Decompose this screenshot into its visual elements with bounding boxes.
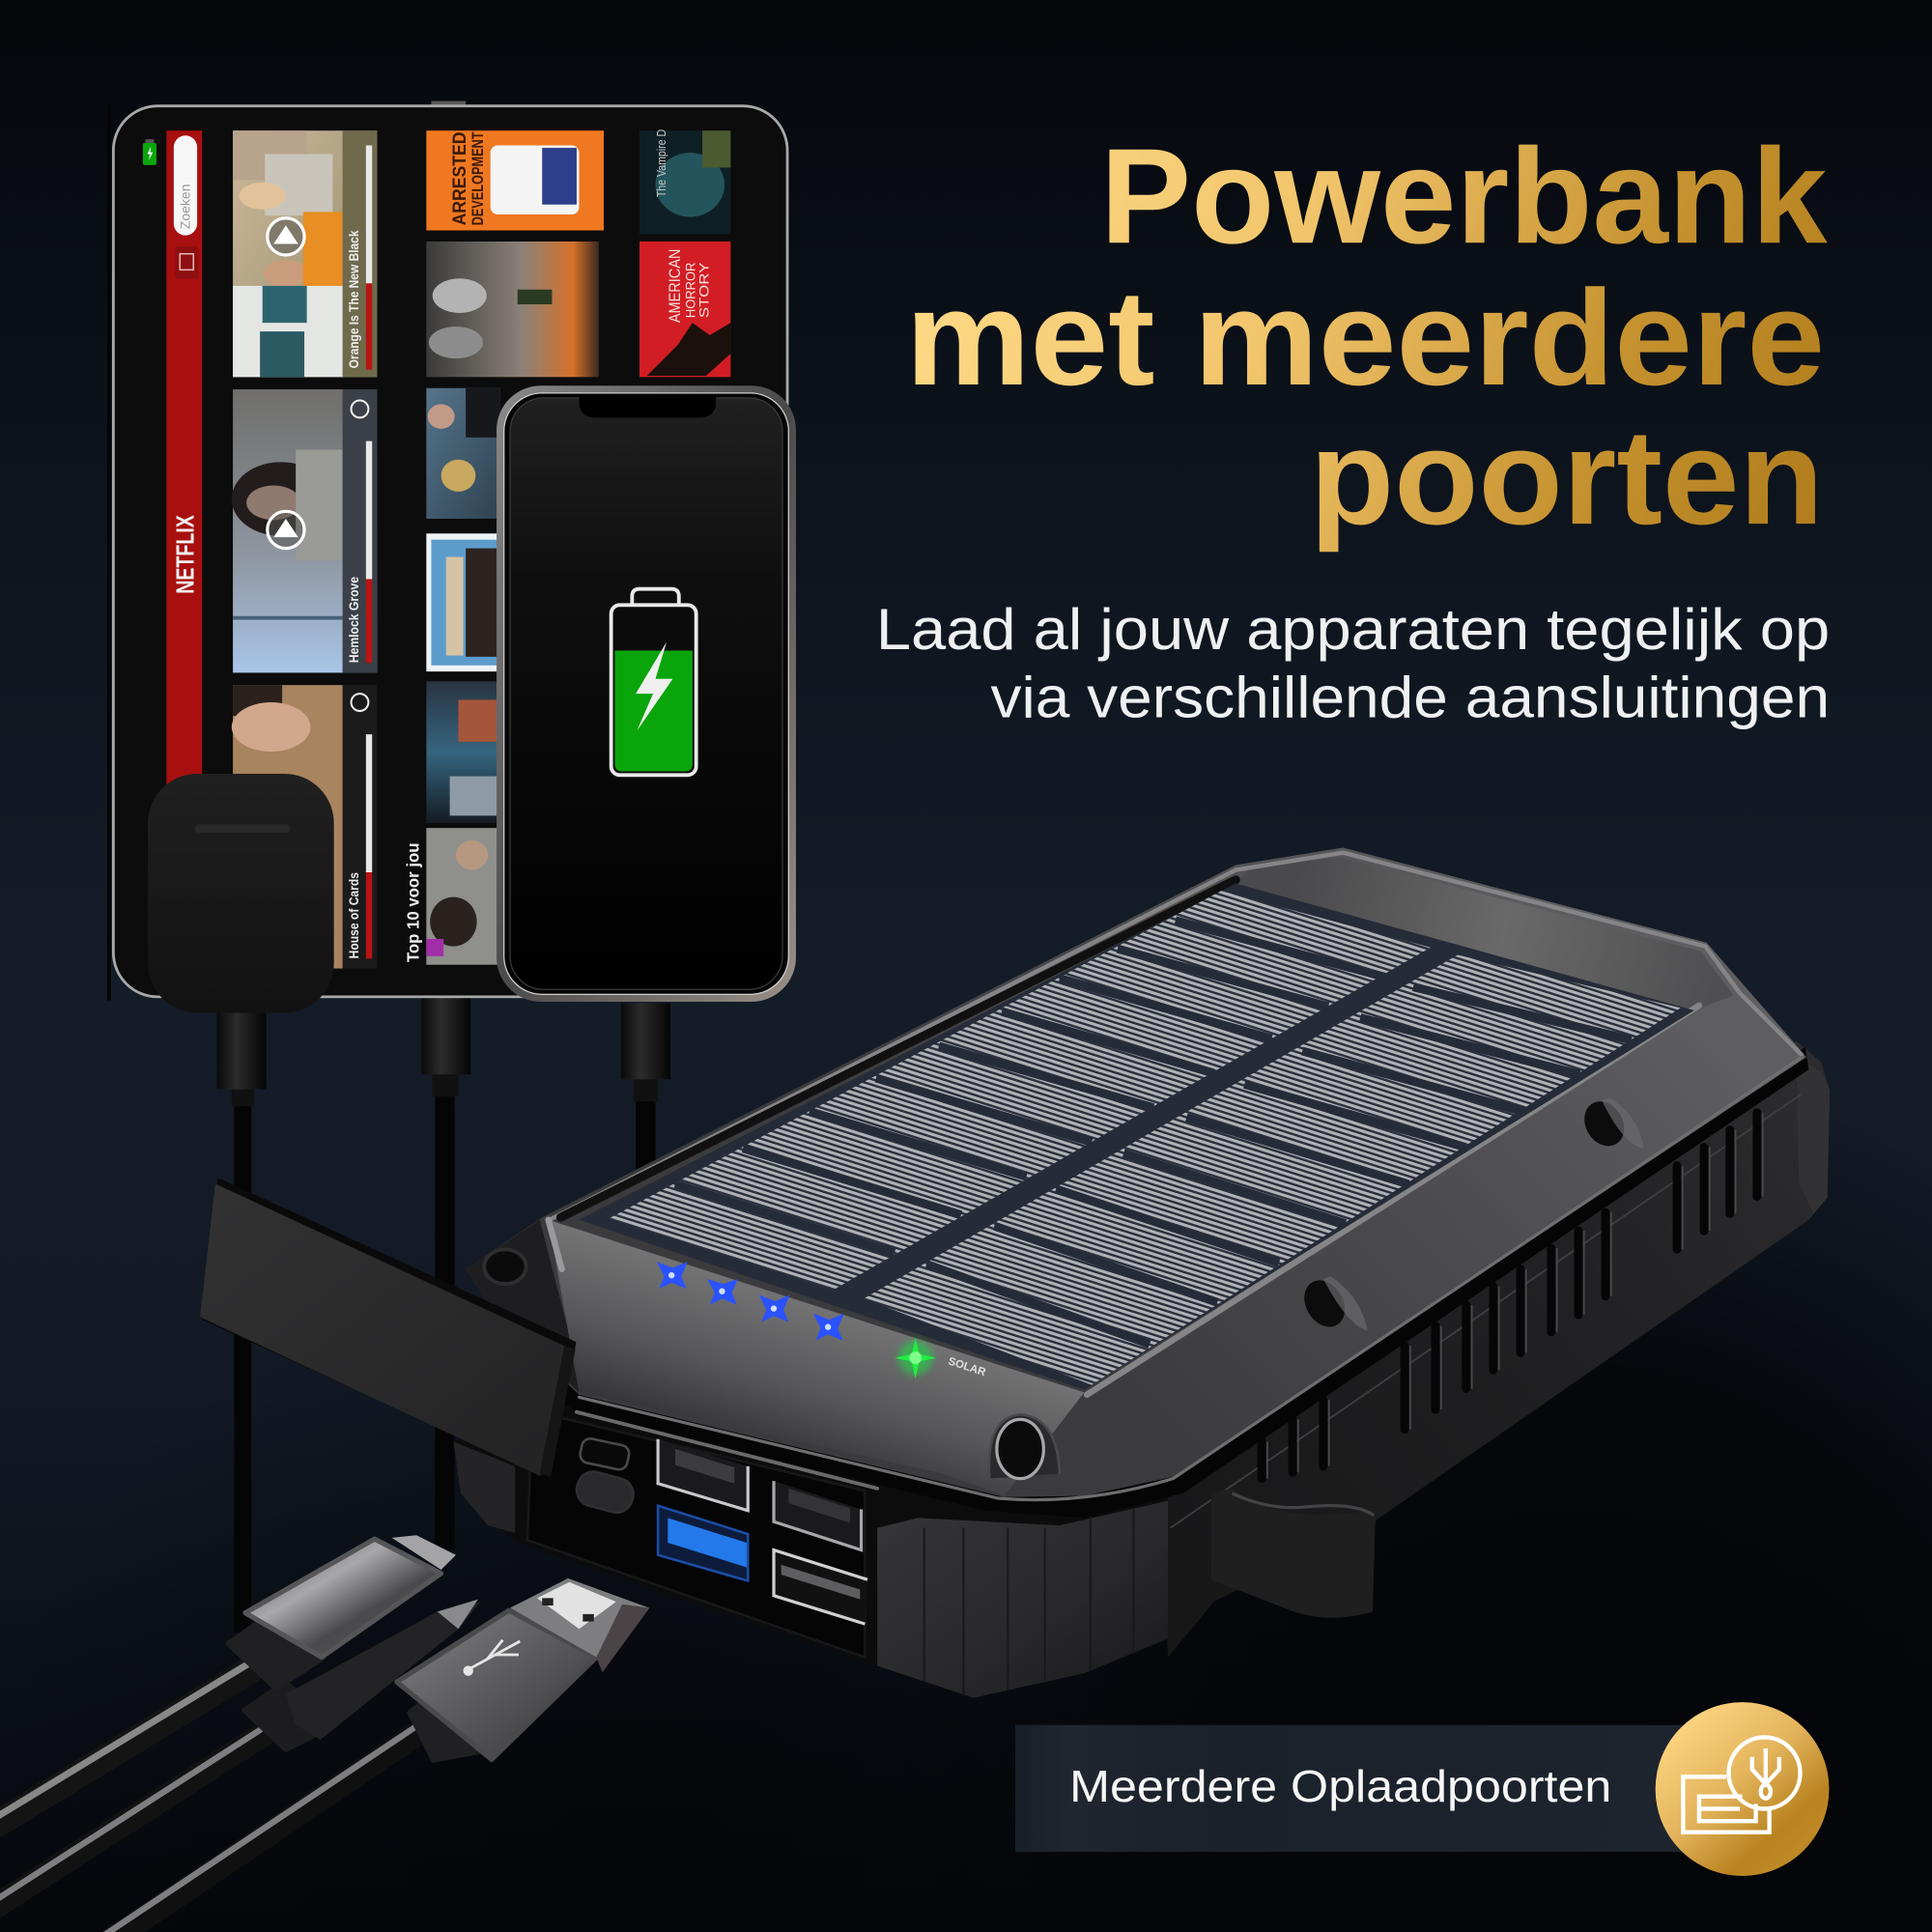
thumbnail: Hemlock Grove: Hemlock Grove xyxy=(347,577,361,663)
top band xyxy=(1236,858,1734,1010)
thumbnail: Hemlock Grove xyxy=(232,389,377,672)
poster: Arrested Development: ARRESTED xyxy=(450,131,470,225)
phone xyxy=(497,385,796,1002)
corner bumper xyxy=(877,1501,1168,1698)
poster: American Horror Story: AMERICAN xyxy=(666,249,684,323)
poster: Vampire Diaries: The Vampire D xyxy=(654,129,668,197)
poster: Arrested Development: DEVELOPMENT xyxy=(469,131,487,225)
netflix sidebar: NETFLIX xyxy=(172,515,199,594)
tablet xyxy=(107,101,787,1001)
left bumper xyxy=(453,1441,515,1533)
usb port 3 xyxy=(774,1481,862,1550)
screw hole front xyxy=(989,1414,1060,1479)
badge label: Meerdere Oplaadpoorten xyxy=(1069,1761,1611,1811)
poster: American Horror Story: HORROR xyxy=(682,263,697,318)
tablet battery icon xyxy=(143,139,156,165)
poster: Vampire Diaries xyxy=(639,129,730,234)
powerbank xyxy=(453,848,1830,1698)
badge panel xyxy=(1015,1725,1705,1852)
netflix sidebar xyxy=(166,130,202,796)
thumbnail: Orange Is The New Black: Orange Is The New Black xyxy=(347,230,361,368)
icon: ports with usb xyxy=(1683,1737,1801,1833)
usb-a cable xyxy=(96,1578,649,1932)
usb port 4 xyxy=(774,1550,867,1624)
front cables xyxy=(0,1535,649,1932)
row label: Top 10 voor jou: Top 10 voor jou xyxy=(404,842,423,962)
title: met meerdere xyxy=(906,262,1825,413)
poster: American Horror Story xyxy=(639,242,730,377)
title xyxy=(906,120,1829,553)
subtitle xyxy=(876,597,1830,729)
middle cable xyxy=(0,1600,480,1907)
badge: Meerdere Oplaadpoorten xyxy=(1015,1702,1829,1876)
solar panel xyxy=(579,884,1694,1390)
led strip area xyxy=(549,1220,1084,1495)
solar label: SOLAR xyxy=(947,1355,988,1378)
poster: portraits row xyxy=(426,828,500,965)
thumbnail: Orange Is The New Black xyxy=(233,130,377,377)
type c port xyxy=(573,1468,637,1516)
title: Powerbank xyxy=(1100,120,1829,271)
screw hole middle xyxy=(1296,1273,1368,1334)
thumbnail: House of Cards xyxy=(232,685,377,969)
usb logo xyxy=(465,1640,520,1674)
green led xyxy=(895,1338,936,1378)
battery icon xyxy=(611,589,696,775)
strap loop xyxy=(1211,1489,1376,1618)
poster: city row xyxy=(426,681,500,823)
tablet screen: netflix app xyxy=(166,129,730,969)
silver edges xyxy=(549,853,1802,1500)
netflix sidebar: Zoeken xyxy=(177,184,192,229)
subtitle: via verschillende aansluitingen xyxy=(991,665,1830,729)
solar cells left xyxy=(609,891,1431,1290)
poster: American Horror Story: STORY xyxy=(696,262,711,318)
airpods case xyxy=(148,774,334,1012)
title: poorten xyxy=(1310,401,1824,553)
front face xyxy=(453,1392,1168,1698)
micro usb port xyxy=(579,1437,631,1471)
micro usb cable xyxy=(0,1535,456,1826)
cable: airpods xyxy=(216,1012,267,1633)
usb port blue xyxy=(658,1506,748,1580)
black rim under top surface xyxy=(542,1047,1808,1518)
cable: tablet xyxy=(421,998,470,1550)
poster: Arrested Development xyxy=(426,130,604,231)
rear cables from devices xyxy=(216,998,670,1633)
cable: phone xyxy=(621,1003,670,1173)
poster: drama row xyxy=(426,388,500,519)
port panel xyxy=(527,1410,867,1658)
flap cover xyxy=(202,1180,576,1476)
subtitle: Laad al jouw apparaten tegelijk op xyxy=(876,597,1830,662)
solar cells right xyxy=(864,955,1681,1385)
thumbnail: House of Cards: House of Cards xyxy=(347,872,361,958)
screw hole right xyxy=(1577,1094,1644,1153)
gold icon circle xyxy=(1656,1702,1829,1876)
poster: Pretty Dirty Secrets xyxy=(426,242,599,377)
usb port 1 xyxy=(658,1439,748,1511)
left corner bumper with hole xyxy=(466,1220,579,1392)
poster: comedy row xyxy=(426,533,500,671)
right side with ribs xyxy=(1158,1041,1830,1658)
blue led indicators xyxy=(657,1262,844,1341)
notch xyxy=(579,397,716,417)
top surface xyxy=(466,848,1806,1497)
